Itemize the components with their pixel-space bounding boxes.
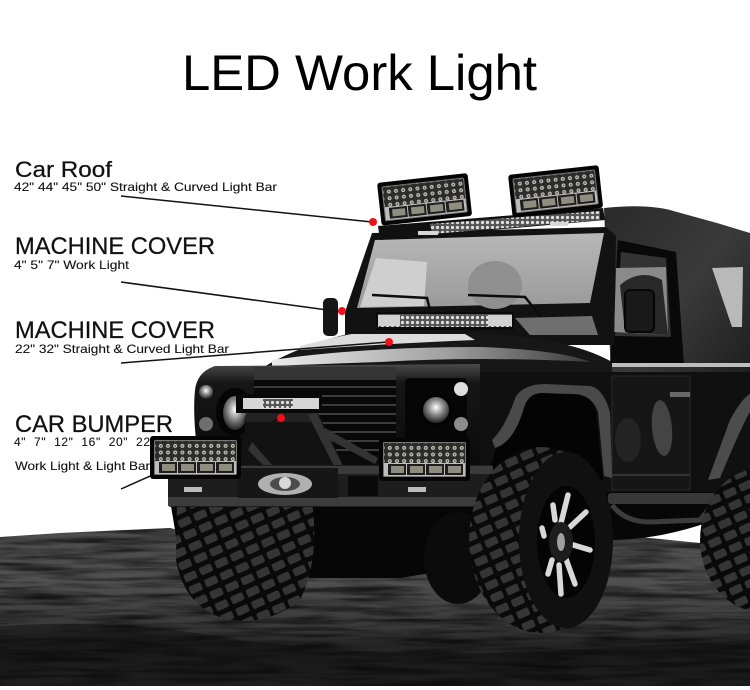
label: machine cover work light: 4" 5" 7" Work Light xyxy=(14,258,130,272)
work light: bumper right xyxy=(379,438,470,481)
rear right tire xyxy=(700,468,750,612)
hood top highlight xyxy=(300,334,475,350)
front right tire xyxy=(469,447,613,633)
jeep truck xyxy=(168,206,750,633)
work light: roof left xyxy=(377,173,472,226)
marker: machine cover light bar xyxy=(385,338,393,346)
grille xyxy=(254,367,396,455)
front left tire xyxy=(176,502,314,621)
lower light bar xyxy=(376,312,514,330)
windshield glass xyxy=(357,233,604,308)
windshield reflection xyxy=(360,258,427,307)
roof mount brackets xyxy=(418,222,568,235)
right headlight cluster xyxy=(405,378,468,442)
work light: bumper left xyxy=(150,436,241,479)
label: car roof: 42" 44" 45" 50" Straight & Curved Light Bar xyxy=(14,180,277,194)
cowl panel below windshield xyxy=(515,316,598,335)
label: car bumper: CAR BUMPER xyxy=(15,411,173,438)
label: machine cover work light: MACHINE COVER xyxy=(15,233,215,260)
side step xyxy=(608,493,722,522)
label: machine cover work light xyxy=(14,233,215,272)
label: machine cover light bar xyxy=(15,317,229,356)
inner rear-axle tire xyxy=(424,512,492,604)
marker: car roof xyxy=(369,218,377,226)
bull bar xyxy=(240,412,378,468)
bumper bar light xyxy=(236,394,322,413)
side door window xyxy=(610,240,684,365)
label: car roof: Car Roof xyxy=(15,157,113,182)
label: machine cover light bar: 22" 32" Straight & Curved Light Bar xyxy=(15,342,229,356)
windshield frame xyxy=(345,227,616,345)
title: LED Work Light xyxy=(182,45,537,101)
marker: car bumper xyxy=(277,414,285,422)
work light: roof right xyxy=(508,165,603,218)
label: machine cover light bar: MACHINE COVER xyxy=(15,317,215,344)
leader line: car bumper xyxy=(121,418,281,489)
hood front band xyxy=(272,347,590,366)
label: car bumper: Work Light & Light Bar xyxy=(15,459,150,473)
leader line: machine cover light bar xyxy=(121,342,388,363)
bumper lamp mounts xyxy=(184,487,426,492)
soft top roof xyxy=(604,206,750,400)
front fender arch xyxy=(492,384,612,478)
marker: machine cover work light xyxy=(338,307,346,315)
wheel well xyxy=(490,393,603,490)
cabin interior seat xyxy=(468,261,522,309)
winch xyxy=(258,473,312,495)
left headlight cluster xyxy=(199,385,254,436)
door and side panel xyxy=(470,372,750,492)
wheel spokes xyxy=(542,495,590,594)
chassis underside xyxy=(170,500,490,578)
ground xyxy=(0,525,750,686)
roof light bar xyxy=(378,208,605,240)
hood xyxy=(262,333,612,378)
side trim highlight line xyxy=(612,363,750,367)
rear side window xyxy=(712,267,743,327)
leader line: machine cover work light xyxy=(121,282,342,312)
label: car roof xyxy=(14,157,277,194)
wipers xyxy=(372,295,545,322)
front bumper xyxy=(168,465,493,507)
label: car bumper: 4" 7" 12" 16" 20" 22 xyxy=(14,435,150,449)
label: car bumper xyxy=(14,411,173,473)
left side mirror xyxy=(323,298,338,336)
rear fender xyxy=(708,394,750,480)
leader line: car roof xyxy=(121,196,372,222)
front fascia xyxy=(194,364,480,470)
shadow under vehicle xyxy=(600,490,720,540)
